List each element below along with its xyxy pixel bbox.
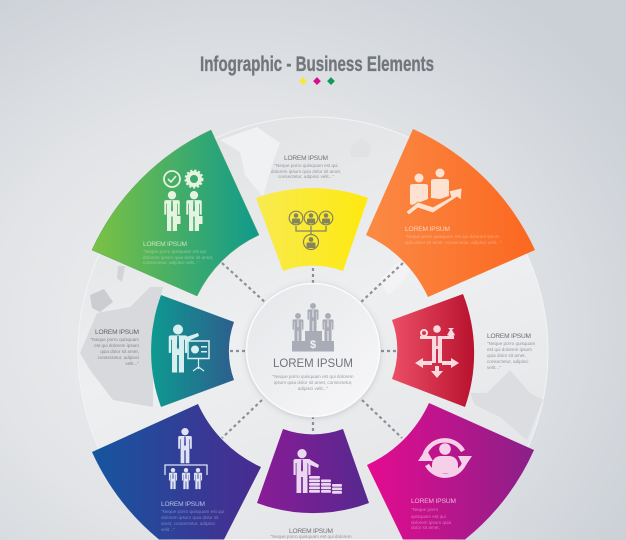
text block: bottom: "Neque porro quisquam est qui dolorem	[270, 534, 352, 539]
blue text: velit..."	[161, 527, 175, 532]
blue text: "Neque porro quisquam est qui	[161, 509, 224, 514]
panel: magenta	[367, 403, 534, 540]
icon: podium with three people: $	[310, 339, 316, 351]
orange text	[405, 226, 502, 245]
text block: top: dolorem ipsum quia dolor sit amet,	[271, 169, 341, 174]
icon: man with choices and arrows	[415, 325, 459, 378]
panel: teal	[151, 295, 234, 407]
center text: "Neque porro quisquam est qui dolorem	[272, 374, 354, 379]
connector dashes	[222, 263, 403, 438]
green text: dolorem ipsum quia dolor sit amet,	[143, 255, 213, 260]
text block: left	[91, 329, 139, 366]
icon: man with coin stacks	[294, 449, 342, 494]
text block: left: velit..."	[125, 361, 139, 366]
world disc	[78, 117, 548, 539]
icon: manager over team	[165, 428, 207, 489]
text block: top: LOREM IPSUM	[284, 155, 328, 162]
magenta text: dolor sit amet,	[411, 525, 440, 530]
text block: right: consectetur, adipisci	[487, 359, 528, 364]
text block: left: quia dolor sit amet,	[100, 349, 139, 354]
icon: two men with rising arrow	[406, 168, 462, 215]
orange text: LOREM IPSUM	[405, 226, 450, 233]
panel: yellow	[256, 188, 368, 271]
orange text: "Neque porro quisquam est qui dolorem ipsum	[405, 234, 500, 239]
blue text: dolorem ipsum quia dolor sit	[161, 515, 219, 520]
center text: ipsum quia dolor sit amet, consectetur,	[274, 380, 352, 385]
magenta text: LOREM IPSUM	[411, 498, 456, 505]
text block: right: quia dolor sit amet,	[487, 353, 526, 358]
panel: blue	[92, 404, 261, 540]
center text	[272, 374, 354, 391]
text block: bottom: LOREM IPSUM	[289, 528, 333, 535]
text block: left: consectetur, adipisci	[98, 355, 139, 360]
blue text: amet, consectetur, adipisci	[161, 521, 215, 526]
text block: left: LOREM IPSUM	[95, 329, 139, 336]
icon: man presenting chart	[169, 324, 209, 372]
center heading: LOREM IPSUM	[273, 358, 353, 370]
icon: org chart circles	[289, 211, 333, 250]
text block: right: est qui dolorem ipsum	[487, 347, 532, 352]
title: Infographic - Business Elements	[200, 53, 434, 76]
green text: "Neque porro quisquam est qui	[143, 249, 206, 254]
orange text: quia dolor sit amet, consectetur, adipisci velit..."	[405, 240, 502, 245]
text block: left: est qui dolorem ipsum	[94, 343, 139, 348]
icon: two men with clock and gear	[164, 170, 202, 231]
blue text: LOREM IPSUM	[161, 501, 205, 508]
text block: bottom	[270, 528, 352, 539]
center text: adipisci velit..."	[298, 386, 328, 391]
blue text	[161, 501, 224, 532]
green text	[143, 241, 213, 265]
text block: right: velit..."	[487, 365, 501, 370]
text block: right: "Neque porro quisquam	[487, 341, 536, 346]
panel: center circle	[246, 284, 380, 416]
icon: person in cycle arrows	[418, 440, 472, 476]
text block: left: "Neque porro quisquam	[91, 337, 139, 342]
panel: green	[92, 130, 259, 296]
title dots	[299, 77, 335, 85]
panel: orange	[366, 129, 535, 297]
world map	[80, 127, 543, 440]
text block: right: LOREM IPSUM	[487, 333, 531, 340]
green text: LOREM IPSUM	[143, 241, 187, 248]
panel: purple	[257, 429, 369, 513]
text block: top	[271, 155, 341, 179]
text block: right	[487, 333, 536, 370]
panel: red	[392, 294, 474, 407]
text block: top: "Neque porro quisquam est qui	[274, 163, 338, 168]
text block: top: consectetur, adipisci velit..."	[278, 174, 334, 179]
magenta text: quisquam est qui	[411, 514, 446, 519]
magenta text: dolorem ipsum quia	[411, 520, 452, 525]
magenta text	[411, 498, 456, 530]
green text: consectetur, adipisci velit..."	[143, 260, 200, 265]
magenta text: "Neque porro	[411, 507, 439, 512]
